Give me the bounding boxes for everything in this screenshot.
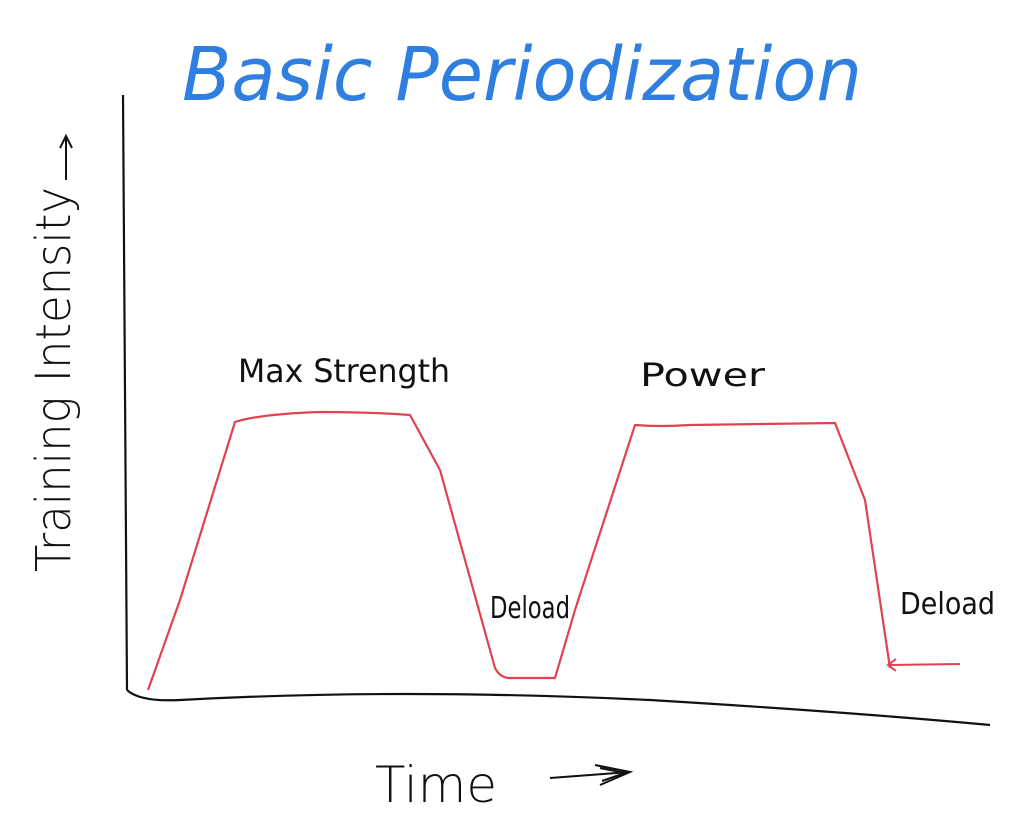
label: deload 2: Deload (900, 587, 995, 622)
label: max strength: Max Strength (238, 352, 450, 390)
periodization curve (148, 412, 890, 690)
y axis (123, 95, 127, 690)
label: deload 1: Deload (490, 591, 570, 626)
arrow: y axis direction (60, 136, 72, 180)
x axis label: Time (375, 756, 497, 814)
x axis (127, 690, 990, 725)
label: power: Power (640, 356, 766, 394)
title: Basic Periodization (182, 32, 862, 118)
arrow: time direction (550, 765, 630, 785)
arrow: deload end (888, 659, 960, 671)
y axis label: Training Intensity (26, 187, 82, 572)
